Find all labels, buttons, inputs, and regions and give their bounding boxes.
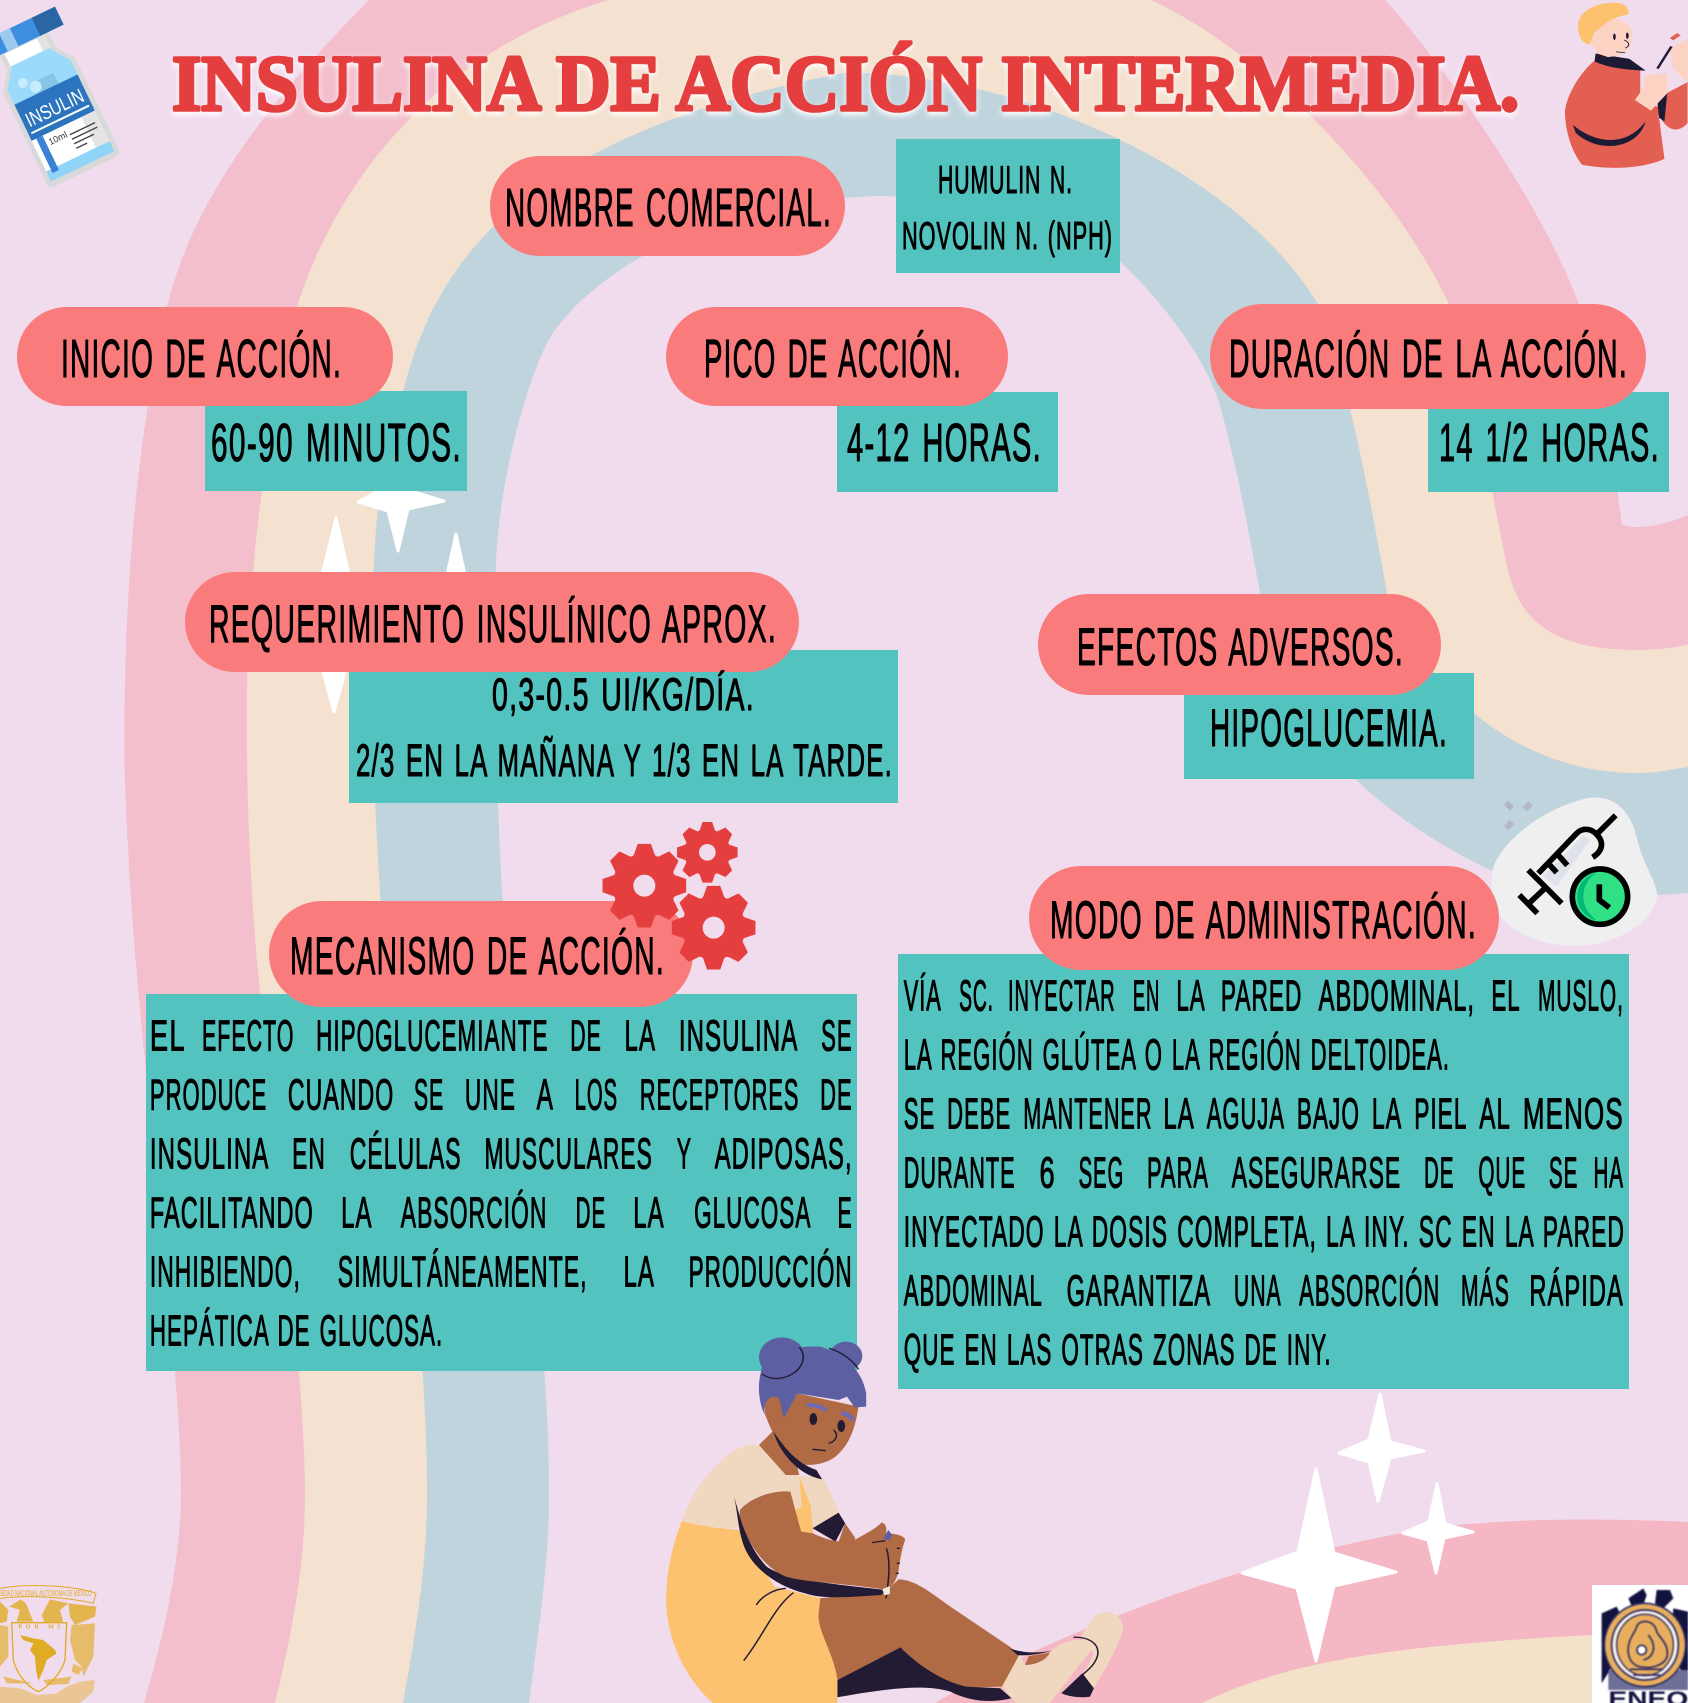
panel: mecanismo de acción text: LA	[633, 1187, 665, 1237]
panel: mecanismo de acción text: INHIBIENDO,	[150, 1246, 301, 1296]
panel: mecanismo de acción text: DE	[576, 1187, 606, 1237]
panel: mecanismo de acción text: EFECTO	[202, 1010, 294, 1060]
pill and box: modo de administración: MÁS	[1461, 1265, 1510, 1315]
pill and box: modo de administración: AGUJA	[1207, 1088, 1285, 1138]
icon: insulin vial: 10ml	[47, 130, 69, 147]
pill and box: duración de la acción	[1210, 304, 1669, 492]
pill and box: modo de administración: DE	[1424, 1147, 1454, 1197]
icon: insulin vial	[0, 7, 125, 191]
panel: mecanismo de acción text: SE	[821, 1010, 853, 1060]
pill and box: nombre comercial: NOVOLIN N. (NPH)	[902, 215, 1113, 258]
panel: mecanismo de acción text: FACILITANDO	[150, 1187, 314, 1237]
pill and box: nombre comercial	[490, 139, 1120, 273]
pill and box: modo de administración: INYECTAR	[1008, 970, 1116, 1020]
pill and box: requerimiento insulínico: REQUERIMIENTO INSULÍNICO APROX.	[209, 595, 777, 654]
pill and box: modo de administración: AL	[1479, 1088, 1511, 1138]
pill and box: modo de administración: SE	[904, 1088, 935, 1138]
pill and box: pico de acción: 4-12 HORAS.	[847, 413, 1042, 473]
panel: mecanismo de acción text: LA	[625, 1010, 656, 1060]
panel: mecanismo de acción text: CUANDO	[288, 1069, 394, 1119]
panel: mecanismo de acción text: HEPÁTICA DE GLUCOSA.	[150, 1305, 443, 1355]
logo: UNAM coat of arms	[0, 1586, 97, 1703]
icon: insulin vial: INSULIN	[22, 85, 88, 132]
panel: mecanismo de acción text: A	[537, 1069, 554, 1119]
pill and box: modo de administración: EL	[1491, 970, 1521, 1020]
pill and box: modo de administración: ABDOMINAL,	[1319, 970, 1475, 1020]
pill and box: modo de administración: ABSORCIÓN	[1299, 1265, 1440, 1315]
pill and box: pico de acción	[666, 307, 1058, 492]
decorative sparkles behind the requirement pill	[323, 490, 465, 712]
panel: mecanismo de acción text: MUSCULARES	[484, 1128, 653, 1178]
pill and box: modo de administración: EN	[1133, 970, 1160, 1020]
illustration: sad girl sitting	[666, 1337, 1123, 1703]
panel: mecanismo de acción text: GLUCOSA	[694, 1187, 811, 1237]
decorative sparkles bottom right	[1242, 1394, 1473, 1661]
panel: mecanismo de acción text: DE	[820, 1069, 853, 1119]
pill and box: modo de administración: 6	[1039, 1147, 1056, 1197]
pill and box: modo de administración: ASEGURARSE	[1232, 1147, 1401, 1197]
pill: mecanismo de acción	[269, 901, 693, 1007]
pill and box: modo de administración: MANTENER	[1023, 1088, 1152, 1138]
pill and box: modo de administración: LA	[1176, 970, 1206, 1020]
pill and box: modo de administración: LA	[1372, 1088, 1402, 1138]
pill and box: inicio de acción: INICIO DE ACCIÓN.	[61, 329, 342, 389]
pill and box: modo de administración: QUE	[1478, 1147, 1526, 1197]
pill and box: modo de administración: PIEL	[1414, 1088, 1467, 1138]
pill and box: efectos adversos: HIPOGLUCEMIA.	[1210, 699, 1448, 758]
pill and box: modo de administración: SC.	[959, 970, 994, 1020]
title: INSULINA DE ACCIÓN INTERMEDIA.	[172, 41, 1519, 128]
panel: mecanismo de acción text: UNE	[465, 1069, 516, 1119]
pill and box: modo de administración: BAJO	[1297, 1088, 1360, 1138]
pill and box: efectos adversos: EFECTOS ADVERSOS.	[1077, 618, 1404, 677]
pill and box: modo de administración: DEBE	[947, 1088, 1011, 1138]
logo: UNAM coat of arms: POR MI	[18, 1624, 61, 1630]
panel: mecanismo de acción text: LA	[623, 1246, 655, 1296]
panel: mecanismo de acción text: DE	[570, 1010, 602, 1060]
pill and box: nombre comercial: NOMBRE COMERCIAL.	[505, 178, 832, 238]
pill and box: requerimiento insulínico: 2/3 EN LA MAÑANA Y 1/3 EN LA TARDE.	[356, 735, 893, 786]
icon: syringe and clock	[1492, 797, 1657, 946]
pill and box: modo de administración	[898, 866, 1629, 1389]
pill and box: modo de administración: VÍA	[904, 970, 942, 1020]
panel: mecanismo de acción text: CÉLULAS	[350, 1128, 462, 1178]
panel: mecanismo de acción text: SIMULTÁNEAMENTE,	[338, 1246, 588, 1296]
pill and box: modo de administración: PARED	[1221, 970, 1302, 1020]
pill and box: modo de administración: UNA	[1234, 1265, 1282, 1315]
panel: mecanismo de acción text: SE	[414, 1069, 444, 1119]
pill and box: modo de administración: GARANTIZA	[1067, 1265, 1211, 1315]
panel: mecanismo de acción text: EN	[292, 1128, 326, 1178]
text: PRODUCCIÓN	[689, 1246, 853, 1296]
pill and box: modo de administración: SE	[1549, 1147, 1578, 1197]
pill and box: inicio de acción: 60-90 MINUTOS.	[211, 413, 462, 473]
panel: mecanismo de acción text: PRODUCE	[150, 1069, 267, 1119]
panel: mecanismo de acción text: LOS	[575, 1069, 618, 1119]
panel: mecanismo de acción text: Y	[677, 1128, 692, 1178]
pill and box: modo de administración: DURANTE	[904, 1147, 1016, 1197]
pill and box: requerimiento insulínico: 0,3-0.5 UI/KG/DÍA.	[492, 669, 755, 720]
pill and box: requerimiento insulínico	[185, 572, 898, 803]
panel: mecanismo de acción text: ADIPOSAS,	[715, 1128, 853, 1178]
illustration: man preparing an injection	[1565, 3, 1688, 168]
logo: ENEO	[1592, 1585, 1688, 1703]
panel: mecanismo de acción text	[146, 994, 857, 1371]
pill and box: modo de administración: ABDOMINAL	[904, 1265, 1043, 1315]
icon: gears	[603, 822, 755, 969]
pill and box: nombre comercial: HUMULIN N.	[938, 159, 1073, 202]
pill and box: modo de administración: HA	[1593, 1147, 1624, 1197]
pill and box: modo de administración: PARA	[1147, 1147, 1209, 1197]
pill and box: modo de administración: SEG	[1079, 1147, 1124, 1197]
panel: mecanismo de acción text: HIPOGLUCEMIANTE	[316, 1010, 549, 1060]
panel: mecanismo de acción text: ABSORCIÓN	[401, 1187, 547, 1237]
panel: mecanismo de acción text: INSULINA	[679, 1010, 798, 1060]
pill and box: modo de administración: LA	[1163, 1088, 1195, 1138]
panel: mecanismo de acción text: RECEPTORES	[640, 1069, 799, 1119]
pill and box: inicio de acción	[17, 307, 467, 491]
panel: mecanismo de acción text: LA	[341, 1187, 373, 1237]
pill: mecanismo de acción: MECANISMO DE ACCIÓN.	[290, 927, 665, 986]
pill and box: pico de acción: PICO DE ACCIÓN.	[704, 329, 962, 389]
panel: mecanismo de acción text: EL	[150, 1010, 186, 1060]
panel: mecanismo de acción text: INSULINA	[150, 1128, 269, 1178]
pill and box: efectos adversos	[1038, 594, 1474, 779]
panel: mecanismo de acción text: E	[837, 1187, 853, 1237]
logo: UNAM coat of arms: SIDAD NACIONAL AUTÓNOMA DE MÉXICO	[0, 1589, 92, 1598]
